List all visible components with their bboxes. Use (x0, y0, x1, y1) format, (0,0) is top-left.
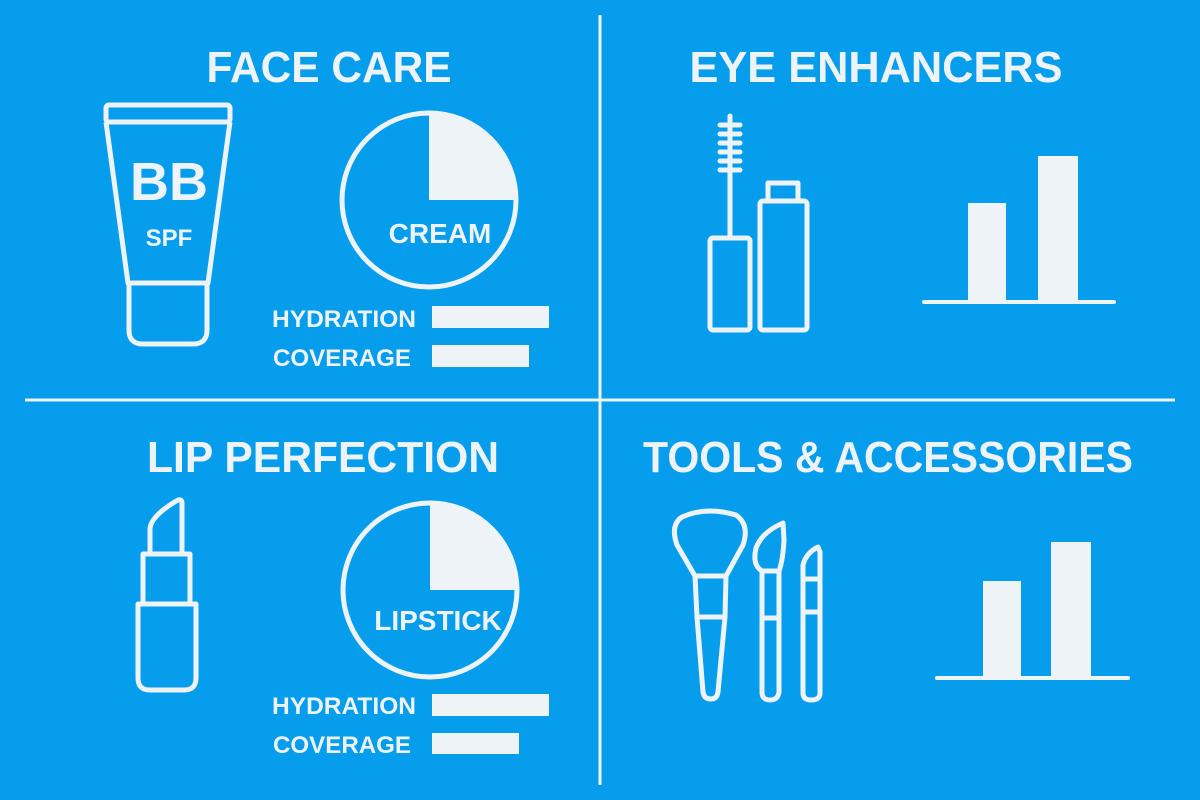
bar: hydration: HYDRATION (272, 306, 416, 333)
icon: BB cream tube: BB (130, 152, 208, 212)
panel: eye enhancers (690, 43, 1116, 330)
chart: lipstick pie (343, 503, 517, 677)
bar: hydration (272, 693, 549, 720)
bar: coverage: COVERAGE (273, 345, 411, 372)
chart: cream pie (342, 113, 516, 287)
panel: face care (106, 43, 549, 372)
heading: lip perfection: LIP PERFECTION (147, 433, 499, 482)
chart: tools bar chart (935, 542, 1130, 680)
icon: BB cream tube (106, 105, 230, 344)
bar: coverage: COVERAGE (273, 732, 411, 759)
panel: lip perfection (138, 433, 549, 759)
bar: coverage (273, 345, 529, 372)
icon: lipstick (138, 500, 196, 690)
chart: eye bar chart (922, 156, 1116, 304)
panel: tools & accessories (643, 433, 1133, 700)
chart: cream pie: CREAM (389, 218, 491, 249)
icon: brushes (674, 511, 820, 700)
heading: face care: FACE CARE (206, 43, 452, 92)
bar: hydration (272, 306, 549, 333)
heading: eye enhancers: EYE ENHANCERS (690, 43, 1062, 92)
icon: BB cream tube: SPF (146, 225, 192, 252)
icon: mascara (710, 116, 807, 330)
chart: lipstick pie: LIPSTICK (374, 605, 502, 636)
heading: tools & accessories: TOOLS & ACCESSORIES (643, 433, 1133, 482)
bar: hydration: HYDRATION (272, 693, 416, 720)
bar: coverage (273, 732, 519, 759)
